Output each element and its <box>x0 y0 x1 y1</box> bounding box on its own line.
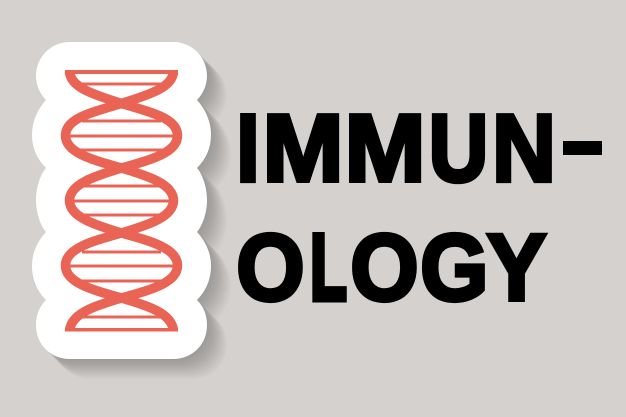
title line 2: O <box>236 215 305 321</box>
title line 2: G <box>420 215 488 321</box>
DNA strands <box>66 72 178 331</box>
long shadow of sticker <box>33 43 231 379</box>
white sticker shape <box>32 42 211 359</box>
title line 2: O <box>350 215 419 321</box>
title hyphen <box>563 141 602 155</box>
title line 1: N <box>492 95 556 202</box>
title line 1: U <box>429 94 488 201</box>
icon: DNA double helix <box>65 70 178 332</box>
DNA rungs <box>65 70 178 332</box>
title line 2: Y <box>487 214 546 321</box>
title line 1 <box>236 94 556 202</box>
title line 1: M <box>344 95 426 202</box>
title <box>236 94 602 321</box>
title line 1: I <box>236 96 260 202</box>
title line 2: L <box>310 215 347 320</box>
title line 1: M <box>262 95 344 202</box>
title line 2 <box>236 214 546 321</box>
